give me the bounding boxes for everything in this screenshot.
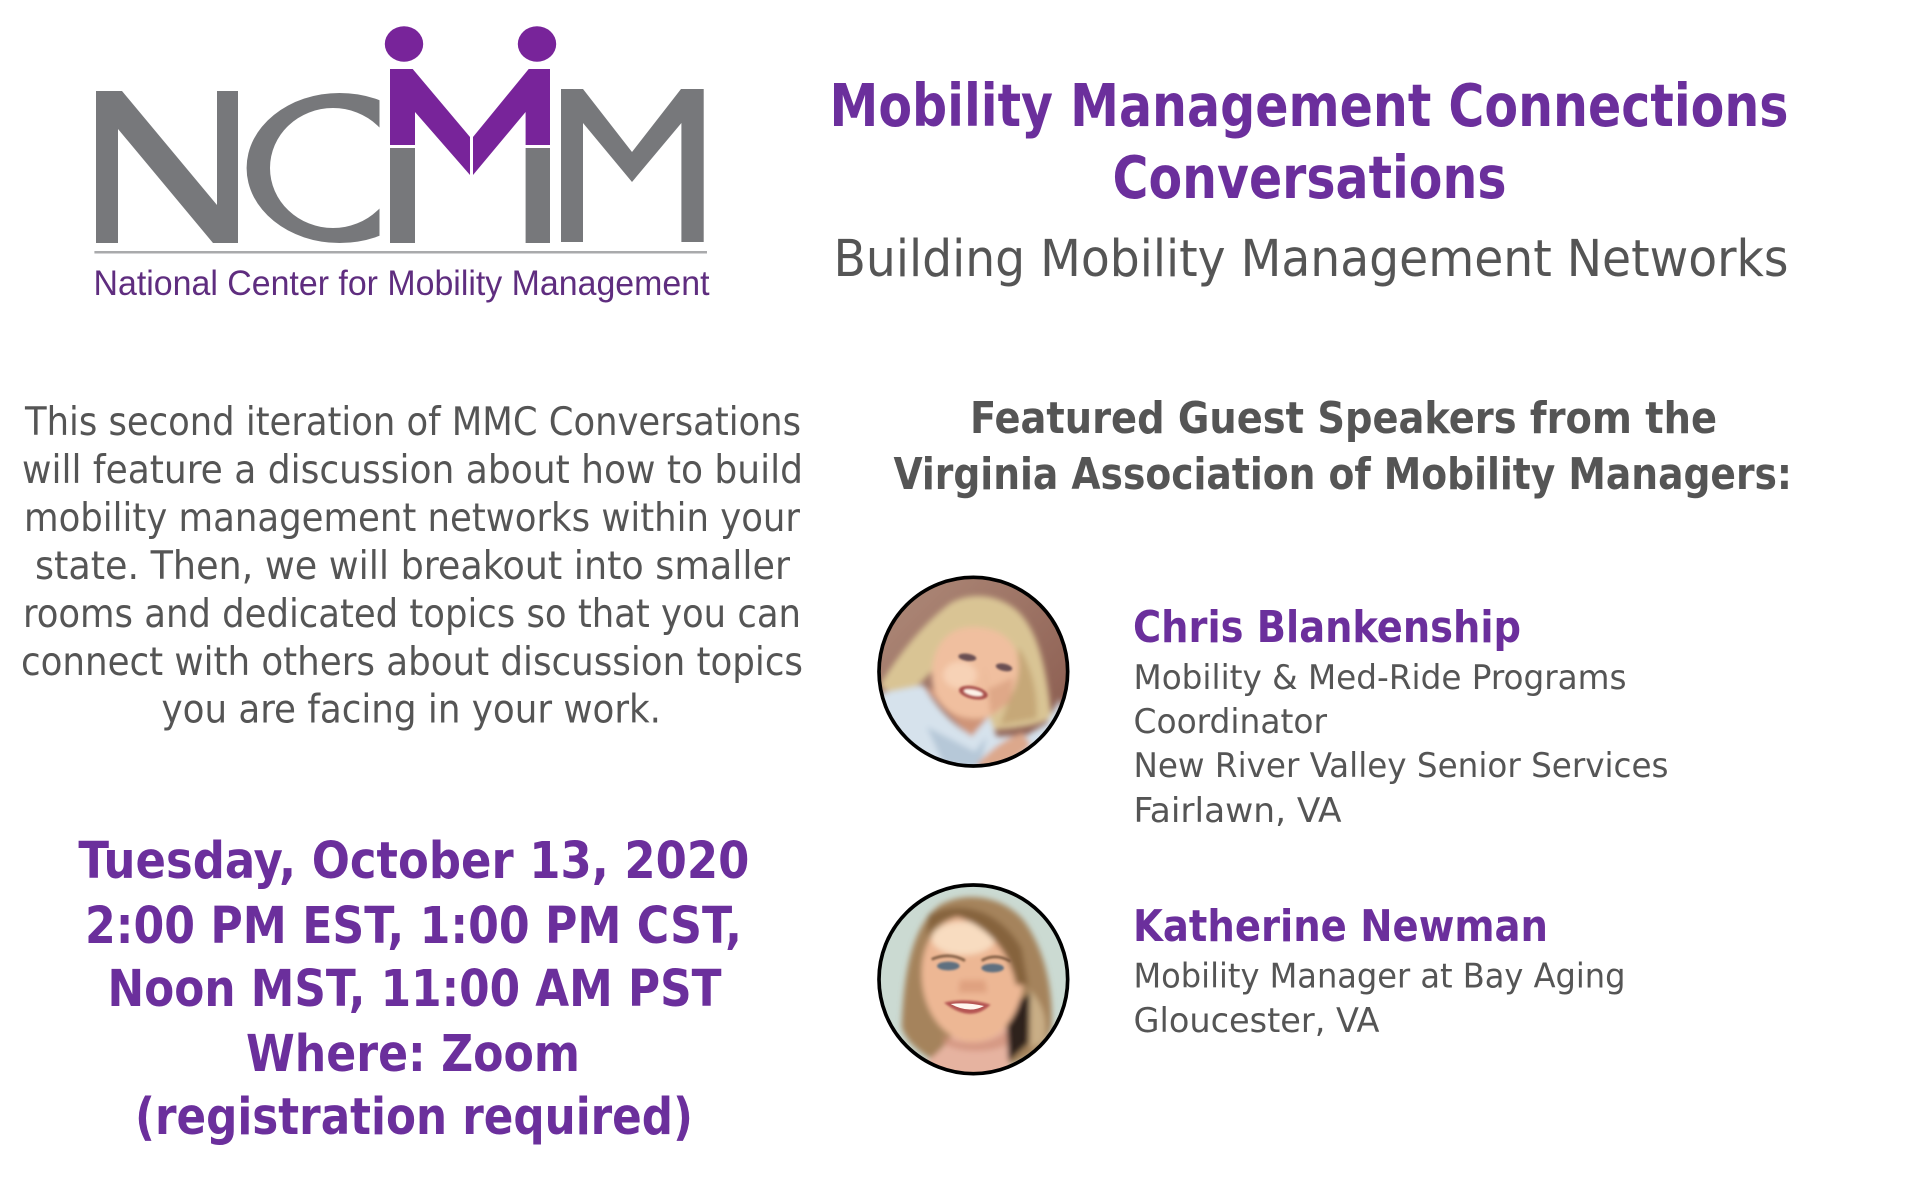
title: [830, 71, 1788, 212]
featured speakers heading: Featured Guest Speakers from the: [970, 393, 1717, 444]
speaker role and location: [1134, 956, 1626, 1041]
speaker name: Chris Blankenship: [1133, 602, 1521, 653]
speaker role and location: Fairlawn, VA: [1134, 791, 1342, 831]
description text block: connect with others about discussion topics: [21, 640, 803, 685]
event date, time and location: Tuesday, October 13, 2020: [78, 832, 749, 891]
event date, time and location: [78, 832, 749, 1147]
logo grey legs of central figures: [390, 148, 550, 243]
logo letter M: [561, 89, 704, 242]
description text block: will feature a discussion about how to build: [22, 448, 803, 493]
logo: NCMM National Center for Mobility Management: [94, 26, 710, 303]
speaker role and location: Mobility Manager at Bay Aging: [1134, 956, 1626, 996]
description text block: rooms and dedicated topics so that you can: [23, 592, 801, 637]
description text block: [21, 400, 803, 732]
speaker role and location: New River Valley Senior Services: [1134, 746, 1668, 786]
description text block: state. Then, we will breakout into smaller: [35, 544, 791, 589]
description text block: This second iteration of MMC Conversations: [24, 400, 801, 445]
logo purple central M figures: [385, 26, 556, 175]
logo letter N: [96, 91, 238, 243]
photo: Katherine Newman: [873, 880, 1073, 1083]
speaker role and location: Coordinator: [1134, 702, 1327, 742]
featured speakers heading: Virginia Association of Mobility Managers:: [894, 449, 1792, 500]
subtitle: Building Mobility Management Networks: [834, 230, 1788, 289]
logo letter C: [246, 93, 380, 243]
event date, time and location: Where: Zoom: [246, 1025, 580, 1084]
speaker: Chris Blankenship: [1133, 602, 1668, 831]
speaker: Katherine Newman: [1133, 901, 1626, 1041]
speaker role and location: [1134, 658, 1668, 831]
title: Mobility Management Connections: [830, 71, 1788, 140]
speaker role and location: Gloucester, VA: [1134, 1001, 1380, 1041]
event date, time and location: 2:00 PM EST, 1:00 PM CST,: [85, 897, 742, 956]
title: Conversations: [1112, 143, 1506, 212]
event date, time and location: Noon MST, 11:00 AM PST: [108, 960, 722, 1019]
featured speakers heading: [894, 393, 1792, 500]
speaker role and location: Mobility & Med-Ride Programs: [1134, 658, 1626, 698]
speaker name: Katherine Newman: [1133, 901, 1548, 952]
photo: Chris Blankenship: [873, 570, 1073, 773]
description text block: you are facing in your work.: [162, 688, 661, 732]
description text block: mobility management networks within your: [24, 496, 801, 541]
logo tagline: National Center for Mobility Management: [94, 264, 710, 303]
event date, time and location: (registration required): [135, 1088, 693, 1147]
